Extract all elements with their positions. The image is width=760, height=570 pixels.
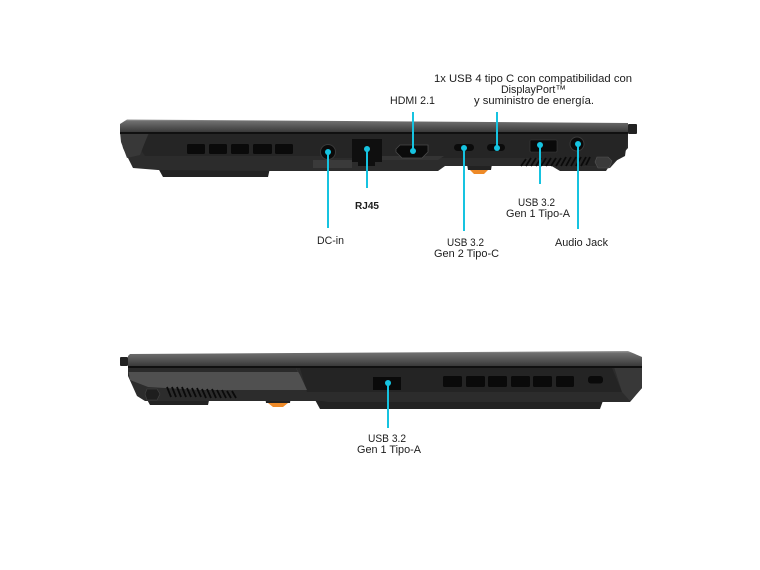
callout: HDMI 2.1	[390, 95, 435, 154]
recessed port panel	[141, 134, 628, 166]
callout: RJ45: RJ45	[355, 201, 379, 212]
port: USB-A	[373, 377, 401, 390]
callout: Audio Jack: Audio Jack	[555, 237, 608, 249]
hex screw	[595, 157, 612, 168]
callout: USB 3.2 Gen 1 Tipo-A: Gen 1 Tipo-A	[506, 208, 571, 220]
base feet and orange marker	[145, 396, 604, 409]
callout: USB 3.2 Gen 1 Tipo-A (right side)	[357, 380, 422, 456]
callout: USB 4 tipo C: 1x USB 4 tipo C con compatibilidad con	[434, 73, 632, 85]
callout: USB 3.2 Gen 1 Tipo-A: USB 3.2	[518, 197, 555, 209]
lock slot	[588, 376, 603, 384]
port: RJ45	[352, 139, 382, 166]
callout: USB 3.2 Gen 2 Tipo-C: Gen 2 Tipo-C	[434, 248, 499, 260]
callout: USB 3.2 Gen 1 Tipo-A (right side): USB 3.2	[368, 433, 406, 445]
callout: USB 3.2 Gen 2 Tipo-C	[434, 145, 499, 260]
callout: HDMI 2.1: HDMI 2.1	[390, 95, 435, 107]
rear knob	[628, 124, 637, 134]
port: DC-in	[320, 144, 336, 160]
lid	[120, 120, 628, 132]
slanted vents	[521, 157, 590, 166]
callout: USB 3.2 Gen 1 Tipo-A (right side): Gen 1 Tipo-A	[357, 444, 422, 456]
gray side panel	[128, 368, 307, 390]
callout: USB 3.2 Gen 2 Tipo-C: USB 3.2	[447, 237, 484, 249]
callout: USB 4 tipo C: y suministro de energía.	[474, 95, 594, 107]
side vents	[187, 144, 293, 154]
port: USB-A	[530, 140, 557, 152]
side vents	[443, 376, 574, 387]
rear knob	[120, 357, 128, 366]
callout: USB 4 tipo C	[434, 73, 632, 151]
body	[128, 366, 642, 402]
lid	[128, 351, 642, 366]
callout: DC-in	[317, 149, 344, 247]
slanted vents	[167, 387, 236, 398]
port: audio jack	[570, 137, 584, 151]
hex screw	[145, 389, 160, 400]
recessed port panel	[300, 368, 622, 392]
base foot and orange marker	[158, 162, 612, 177]
callout: USB 4 tipo C: DisplayPort™	[501, 84, 566, 96]
callout: DC-in: DC-in	[317, 235, 344, 247]
laptop: left-side view (top)	[120, 120, 637, 177]
callout: USB 3.2 Gen 1 Tipo-A	[506, 142, 571, 220]
port: HDMI	[396, 145, 428, 158]
callout: RJ45	[355, 146, 379, 212]
laptop: right-side view (bottom)	[120, 351, 642, 409]
body	[120, 132, 628, 171]
callout: Audio Jack	[555, 141, 608, 249]
port: USB 4	[487, 144, 505, 151]
port: USB-C gen 2	[454, 144, 474, 151]
